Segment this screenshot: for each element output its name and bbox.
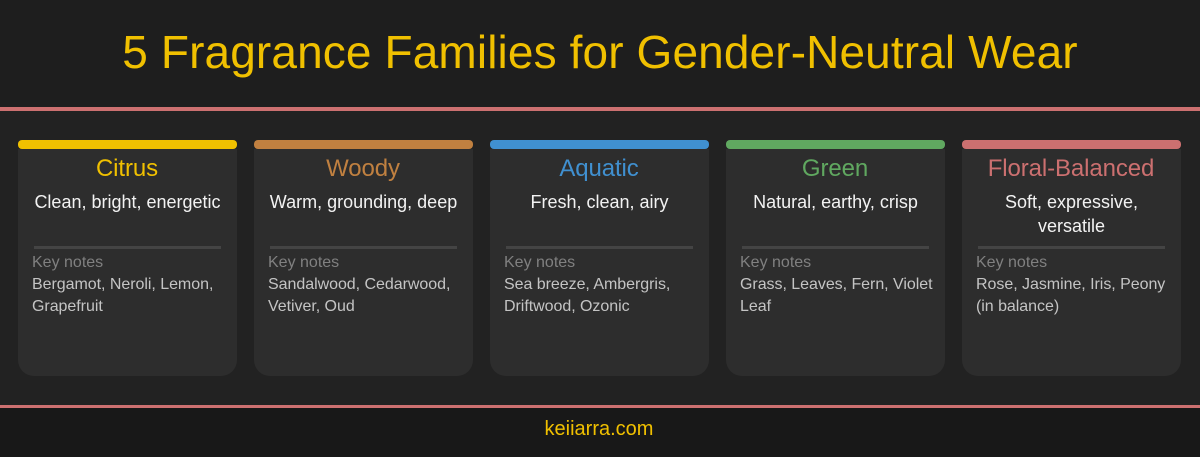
notes: Green: Grass, Leaves, Fern, Violet Leaf — [740, 276, 932, 315]
header band — [0, 0, 1200, 107]
accent bar: Green — [726, 140, 945, 149]
footer band — [0, 408, 1200, 457]
panel: Citrus — [18, 140, 237, 376]
description: Citrus: Clean, bright, energetic — [34, 192, 221, 212]
title: 5 Fragrance Families for Gender-Neutral Wear — [122, 26, 1078, 78]
heading: Green: Green — [802, 155, 868, 182]
panel: Green — [726, 140, 945, 376]
header rule — [0, 107, 1200, 111]
panel: Woody — [254, 140, 473, 376]
accent bar: Aquatic — [490, 140, 709, 149]
footer rule — [0, 405, 1200, 408]
heading: Aquatic: Aquatic — [559, 155, 639, 182]
heading: Citrus: Citrus — [96, 155, 158, 182]
notes: Floral-Balanced: Rose, Jasmine, Iris, Peony (in balance) — [976, 276, 1165, 315]
footer text: keiiarra.com — [545, 418, 653, 440]
accent bar: Citrus — [18, 140, 237, 149]
description: Green: Natural, earthy, crisp — [753, 192, 918, 212]
label: Woody key notes: Key notes — [268, 254, 339, 271]
notes: Aquatic: Sea breeze, Ambergris, Driftwood, Ozonic — [504, 276, 670, 315]
panel: Aquatic — [490, 140, 709, 376]
description: Aquatic: Fresh, clean, airy — [530, 192, 669, 212]
description: Floral-Balanced: Soft, expressive, versatile — [1005, 192, 1138, 236]
description: Woody: Warm, grounding, deep — [270, 192, 457, 212]
label: Green key notes: Key notes — [740, 254, 811, 271]
notes: Citrus: Bergamot, Neroli, Lemon, Grapefruit — [32, 276, 213, 315]
accent bar: Woody — [254, 140, 473, 149]
panel: Floral-Balanced — [962, 140, 1181, 376]
label: Citrus key notes: Key notes — [32, 254, 103, 271]
heading: Woody: Woody — [326, 155, 400, 182]
accent bar: Floral-Balanced — [962, 140, 1181, 149]
label: Floral-Balanced key notes: Key notes — [976, 254, 1047, 271]
heading: Floral-Balanced: Floral-Balanced — [988, 155, 1154, 182]
label: Aquatic key notes: Key notes — [504, 254, 575, 271]
notes: Woody: Sandalwood, Cedarwood, Vetiver, Oud — [268, 276, 450, 315]
